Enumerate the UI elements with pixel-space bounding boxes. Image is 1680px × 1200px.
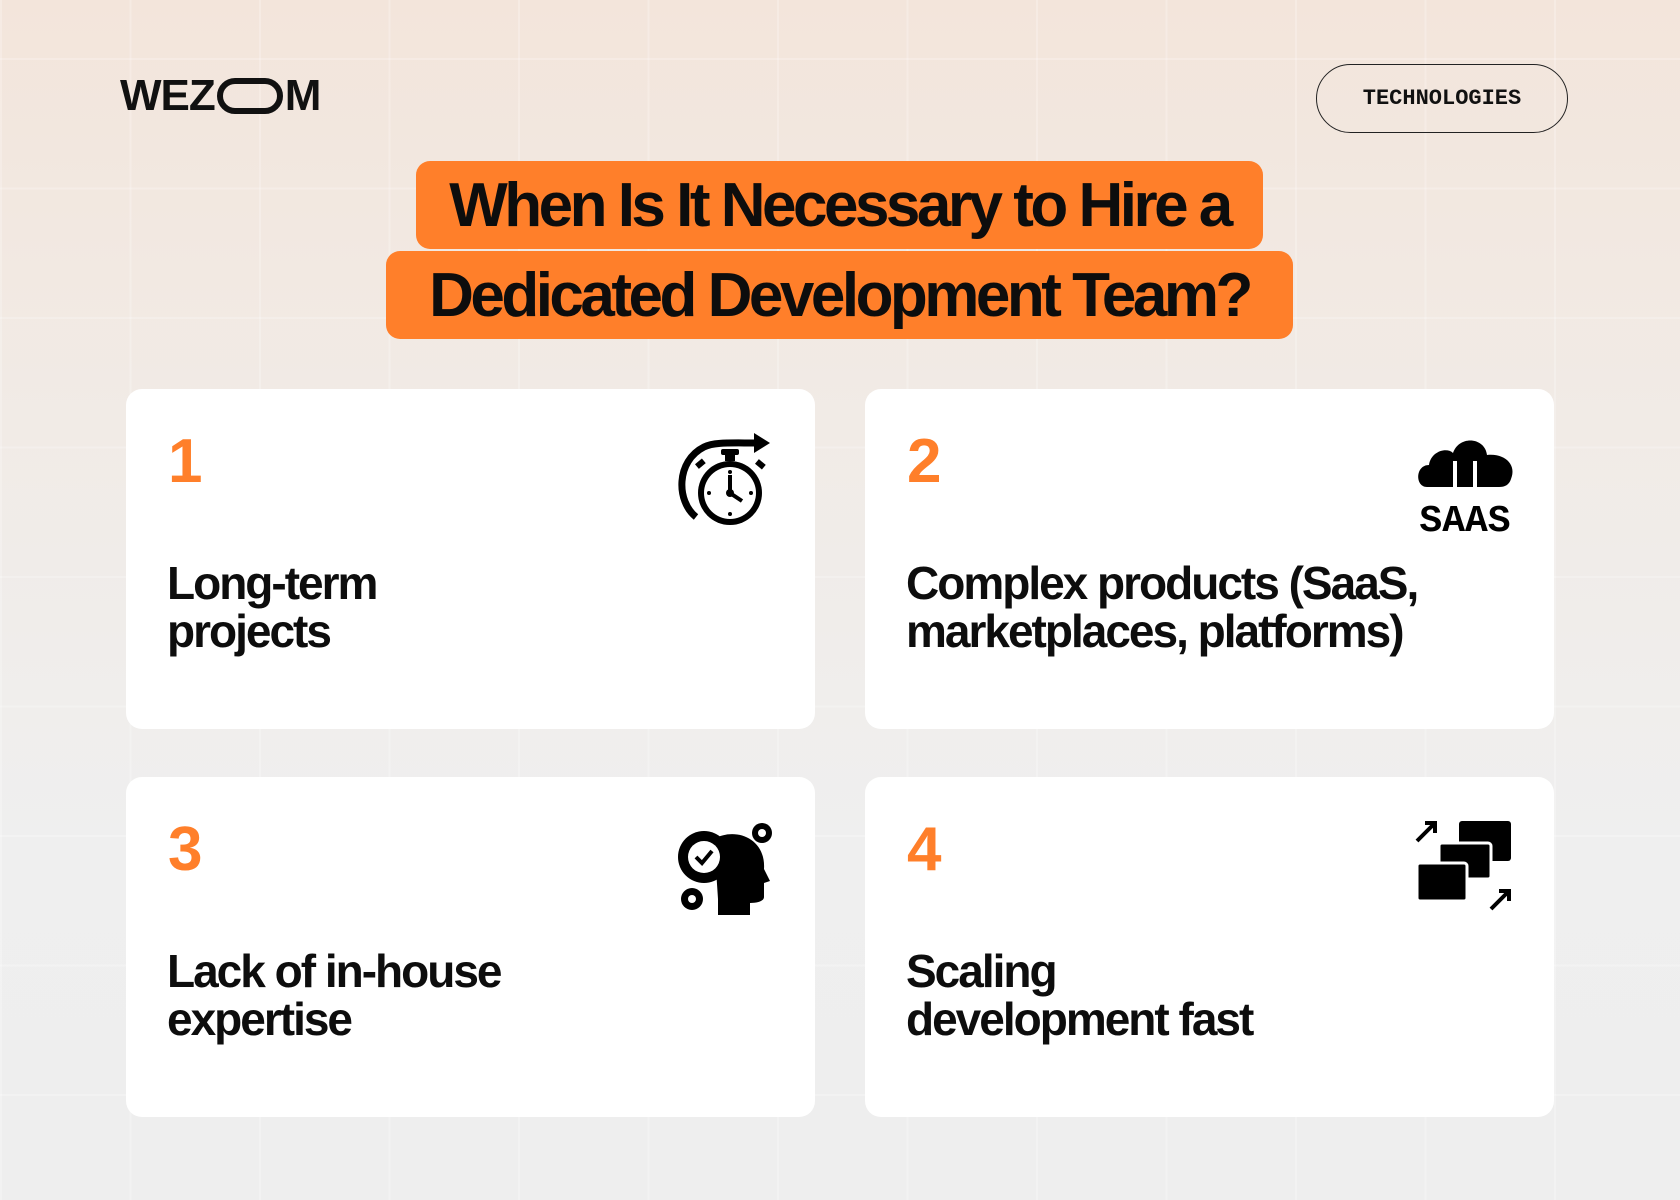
card 3 <box>126 777 815 1117</box>
number 1: 1 <box>168 427 202 496</box>
number 2: 2 <box>907 427 941 496</box>
icon: scaling windows <box>1416 821 1511 910</box>
text 1: Long-term <box>167 557 376 609</box>
text 4: development fast <box>906 993 1252 1045</box>
card 2 <box>865 389 1554 729</box>
title line 2: Dedicated Development Team? <box>429 260 1250 330</box>
text 1 <box>167 557 376 657</box>
number 3: 3 <box>168 815 202 884</box>
tag: technologies: TECHNOLOGIES <box>1363 86 1521 111</box>
title <box>386 161 1293 339</box>
icon: stopwatch <box>678 433 770 525</box>
text 1: projects <box>167 605 330 657</box>
text 4: Scaling <box>906 945 1056 997</box>
text 2: marketplaces, platforms) <box>906 605 1403 657</box>
title line 1: When Is It Necessary to Hire a <box>449 170 1230 240</box>
icon: head with gears <box>678 823 772 915</box>
text 4 <box>906 945 1254 1045</box>
logo: WEZ M <box>120 71 320 120</box>
text 3 <box>167 945 501 1045</box>
text 2 <box>906 557 1417 657</box>
tag: technologies <box>1316 64 1568 133</box>
card 4 <box>865 777 1554 1117</box>
text 3: Lack of in-house <box>167 945 500 997</box>
text 2: Complex products (SaaS, <box>906 557 1417 609</box>
number 4: 4 <box>907 815 941 884</box>
text 3: expertise <box>167 993 351 1045</box>
icon: saas cloud <box>1418 440 1512 535</box>
card 1 <box>126 389 815 729</box>
